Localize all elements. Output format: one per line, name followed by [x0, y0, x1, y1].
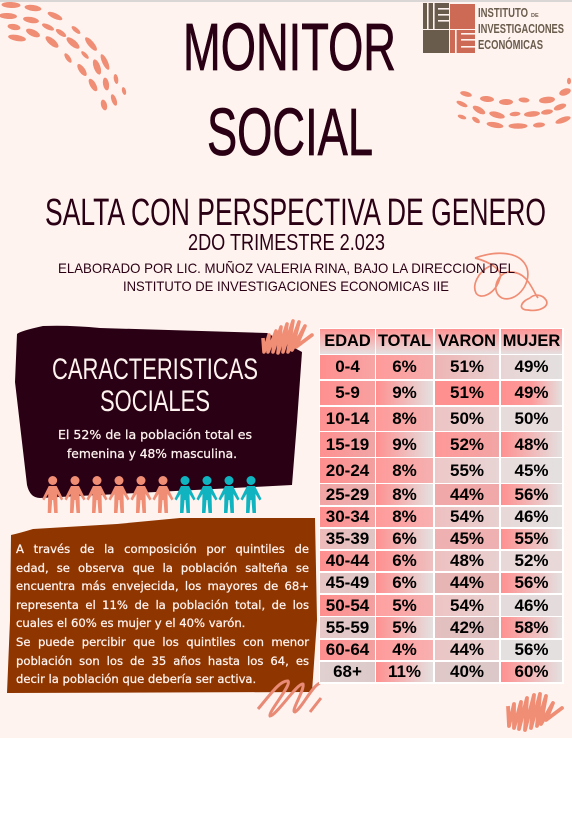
text block: analysis paragraph	[16, 542, 310, 686]
row 0-4: 0-4	[335, 357, 360, 376]
row 60-64: 56%	[514, 640, 549, 659]
row 40-44: 6%	[392, 551, 417, 570]
logo: IIE: DE	[531, 13, 539, 19]
row 30-34: 8%	[392, 507, 417, 526]
panel heading	[52, 353, 258, 418]
credit text	[58, 260, 515, 294]
row 45-49: 44%	[450, 573, 484, 592]
text block: analysis paragraph: decir la población que debería ser activa.	[16, 672, 256, 686]
text block: analysis paragraph: cuales el 60% es mujer y el 40% varón.	[16, 616, 245, 630]
row 15-19: 48%	[514, 434, 549, 454]
subtitle	[45, 192, 546, 255]
table header: MUJER	[503, 332, 560, 350]
row 30-34: 30-34	[326, 507, 369, 526]
row 35-39: 45%	[450, 529, 484, 548]
row 45-49: 6%	[392, 573, 417, 592]
panel: caracteristicas sociales	[15, 326, 302, 498]
row 0-4	[320, 355, 562, 379]
row 50-54: 5%	[392, 596, 417, 614]
row 5-9	[320, 381, 562, 405]
row 68+: 60%	[514, 662, 549, 681]
panel: brown text background	[7, 518, 317, 693]
row 25-29: 25-29	[326, 484, 369, 504]
title: SOCIAL	[207, 95, 373, 170]
row 50-54: 50-54	[326, 596, 369, 614]
text block: analysis paragraph: representa el 11% de la población total, de los	[16, 598, 309, 612]
row 40-44: 48%	[450, 551, 484, 570]
row 15-19: 15-19	[326, 434, 369, 454]
credit text: ELABORADO POR LIC. MUÑOZ VALERIA RINA, BAJO LA DIRECCION DEL	[58, 260, 515, 276]
row 25-29: 44%	[450, 484, 484, 504]
row 0-4: 49%	[514, 357, 549, 376]
row 40-44	[320, 551, 562, 571]
row 50-54: 54%	[450, 596, 484, 614]
table header: VARON	[438, 332, 496, 350]
row 55-59: 58%	[514, 618, 549, 636]
table header: TOTAL	[378, 332, 431, 350]
row 55-59: 55-59	[326, 618, 369, 636]
text block: analysis paragraph: población son los de 35 años hasta los 64, es	[16, 654, 309, 668]
row 20-24: 55%	[450, 460, 484, 480]
logo: IIE	[423, 3, 564, 53]
text block: analysis paragraph: A través de la composición por quintiles de	[16, 542, 309, 556]
panel text: femenina y 48% masculina.	[67, 447, 237, 461]
row 50-54	[320, 595, 562, 616]
scribble: bottom of brown panel	[258, 681, 321, 716]
panel text: El 52% de la población total es	[58, 428, 252, 442]
row 5-9: 51%	[450, 383, 484, 402]
row 5-9: 9%	[392, 383, 417, 402]
row 25-29: 8%	[392, 484, 417, 504]
row 10-14	[320, 407, 562, 431]
logo: IIE: INSTITUTO	[478, 6, 528, 20]
row 10-14: 50%	[450, 409, 484, 428]
row 60-64: 60-64	[326, 640, 369, 659]
row 55-59: 5%	[392, 618, 417, 636]
panel heading: CARACTERISTICAS	[52, 353, 258, 386]
row 20-24	[320, 458, 562, 483]
row 10-14: 10-14	[326, 409, 369, 428]
row 35-39: 6%	[392, 529, 417, 548]
scribble: top right of dark panel	[263, 321, 312, 353]
panel text	[58, 428, 252, 461]
panel heading: SOCIALES	[100, 385, 210, 418]
row 20-24: 20-24	[326, 460, 369, 480]
row 50-54: 46%	[514, 596, 549, 614]
row 30-34: 46%	[514, 507, 549, 526]
title: MONITOR	[183, 10, 396, 85]
row 35-39: 35-39	[326, 529, 369, 548]
row 55-59	[320, 617, 562, 638]
row 40-44: 52%	[514, 551, 549, 570]
subtitle: 2DO TRIMESTRE 2.023	[188, 229, 385, 255]
row 10-14: 8%	[392, 409, 417, 428]
row 68+: 40%	[450, 662, 484, 681]
scribble: bottom right	[508, 694, 562, 730]
row 68+	[320, 662, 562, 682]
row 20-24: 45%	[514, 460, 549, 480]
row 68+: 68+	[333, 662, 362, 681]
row 35-39	[320, 529, 562, 549]
row 0-4: 51%	[450, 357, 484, 376]
row 15-19	[320, 432, 562, 457]
text block: analysis paragraph: Se puede percibir que los quintiles con menor	[16, 635, 309, 649]
text block: analysis paragraph: edad, se observa que la población salteña se	[16, 561, 309, 575]
row 10-14: 50%	[514, 409, 549, 428]
icons: people	[42, 476, 262, 513]
row 30-34: 54%	[450, 507, 484, 526]
row 30-34	[320, 507, 562, 527]
row 60-64	[320, 640, 562, 660]
table header: EDAD	[324, 332, 371, 350]
row 25-29	[320, 484, 562, 505]
row 15-19: 9%	[392, 434, 417, 454]
row 55-59: 42%	[450, 618, 484, 636]
title	[183, 10, 396, 170]
decoration: spiral scribble	[475, 253, 547, 310]
row 5-9: 5-9	[335, 383, 360, 402]
credit text: INSTITUTO DE INVESTIGACIONES ECONOMICAS IIE	[123, 278, 449, 294]
row 15-19: 52%	[450, 434, 484, 454]
row 20-24: 8%	[392, 460, 417, 480]
row 45-49	[320, 573, 562, 593]
text block: analysis paragraph: encuentra más envejecida, los mayores de 68+	[16, 579, 309, 593]
row 45-49: 45-49	[326, 573, 369, 592]
logo: IIE: ECONÓMICAS	[478, 37, 543, 52]
table: population by age	[319, 328, 564, 684]
table header	[320, 329, 562, 354]
row 68+: 11%	[388, 662, 421, 681]
row 45-49: 56%	[514, 573, 549, 592]
decoration: dashes top left	[0, 2, 127, 111]
row 60-64: 44%	[450, 640, 484, 659]
row 25-29: 56%	[514, 484, 549, 504]
row 0-4: 6%	[392, 357, 417, 376]
row 5-9: 49%	[514, 383, 549, 402]
row 40-44: 40-44	[326, 551, 369, 570]
decoration: dashes top right	[456, 78, 572, 129]
row 35-39: 55%	[514, 529, 549, 548]
row 60-64: 4%	[392, 640, 417, 659]
